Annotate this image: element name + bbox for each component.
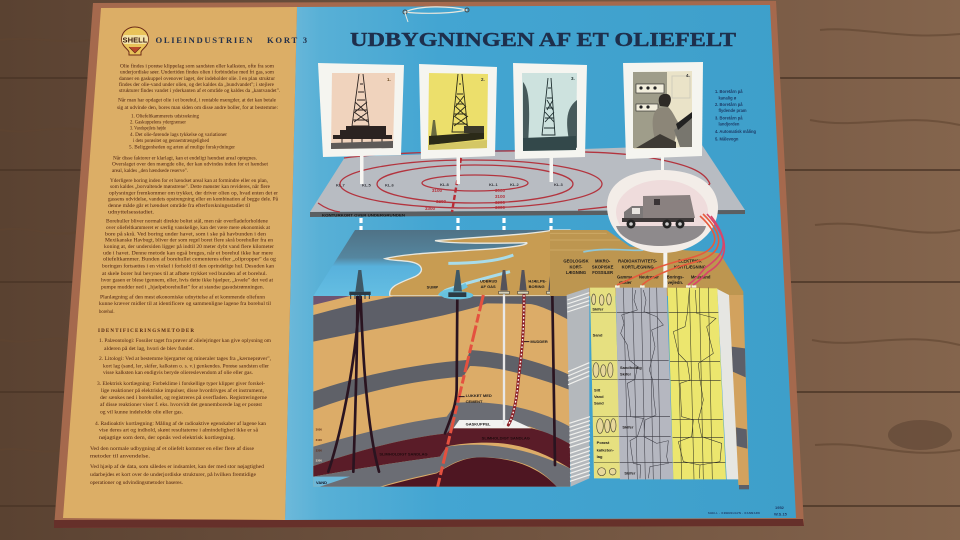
- yellow fossil column: Sand: [594, 401, 604, 406]
- text block: reserves and drilling: udnyttelsesstadiet.: [108, 210, 154, 216]
- text block: reserves and drilling: gassens udvidelse, vandets opstrengning eller en kombination af begge dele. På: [108, 196, 279, 202]
- legend: photo key: kanalig ø: [718, 96, 737, 100]
- print credit: W.S.15: [774, 512, 788, 516]
- photo card 3: land derrick in jungle: [513, 63, 587, 159]
- derricks: [349, 270, 558, 299]
- text block: reserves and drilling: bore på skrå. Ved boring under havet, som i ske på havbunden i den: [105, 232, 267, 238]
- map labels: [336, 182, 563, 188]
- radioactivity log: Skifer: [624, 471, 636, 476]
- text block: introduction: Når man har opdaget olie i et borehul, i rentable mængder, at det kan betale: [118, 98, 276, 104]
- yellow fossil column: Porøst: [597, 440, 610, 445]
- column headings: SKOPISKE: [592, 264, 614, 269]
- list: factors: 1. Oliefeltkammerets udstrækning: [131, 114, 200, 120]
- map labels: KL.6: [385, 182, 394, 188]
- text block: reserves and drilling: oplysninger fremkommer om trykket, der driver olien op, hvad enten det er: [109, 192, 279, 196]
- column headings: Neutroner: [639, 274, 659, 279]
- poster frame: [54, 1, 804, 528]
- text block: reserves and drilling: boringen fortsættes i en vinkel i forhold til den oprindelige hul. Desuden kan: [102, 264, 275, 270]
- column headings: vejledn.: [668, 280, 683, 285]
- terrain behind logs: [550, 230, 743, 296]
- column headings: FOSSILER: [592, 270, 613, 275]
- heading: identification methods: IDENTIFICERINGSMETODER: [98, 329, 194, 334]
- text block: methods: 1. Palæontologi: Fossiler taget fra prøver af olielejringer kan give oplysning om: [99, 339, 271, 344]
- text block: methods: af disse reaktioner viser f. eks. hvorvidt det gennemborede lag er porøst: [100, 403, 263, 408]
- title: UDBYGNINGEN AF ET OLIEFELT: [350, 29, 737, 51]
- text block: reserves and drilling: hvor gasen er blese igennem, eller, hvis dette ikke hjælper, „kvæle" det ved at: [101, 278, 274, 284]
- block diagram: oil field cross-section: [313, 230, 570, 487]
- text block: methods: lige reaktioner på elektriske impulser, disse hvordrivges af et instrument,: [101, 388, 264, 394]
- list: factors: [129, 114, 235, 150]
- list: factors: 5. Beliggenheden og arten af mulige forskydninger: [129, 146, 235, 150]
- text block: reserves and drilling: borehul.: [99, 310, 114, 315]
- contour depth labels: 3100: [495, 194, 506, 199]
- text block: introduction: findes der olie-vand under olien, og det kaldes da „bundvandet"; i stejlere: [119, 83, 274, 88]
- list: factors: 4. Det olie-førende lags tykkelse og variationer: [130, 133, 227, 138]
- section labels: SLIMHOLDIGT SANDLAG: [379, 451, 428, 456]
- legend: photo key: 2. Boretårn på: [715, 102, 743, 107]
- text block: introduction: sig at udvinde den, bores man siden om disse andre boller, for at bestemme:: [117, 106, 278, 111]
- column headings: stråler: [619, 280, 632, 285]
- legend: photo key: 5. Målevogn: [715, 136, 739, 142]
- contour depth labels: 3200: [436, 199, 447, 204]
- panel: tan text column: [63, 7, 307, 520]
- contour depth labels: 3000: [495, 188, 506, 193]
- column headings: MIKRO-: [595, 258, 611, 263]
- subtitle: KORT 3: [267, 35, 307, 45]
- rock layers: [313, 296, 570, 487]
- legend: photo key: [715, 89, 757, 142]
- text block: methods: 3. Elektrisk kortlægning: Forbeklime i forskellige typer klipper giver forskel-: [97, 382, 265, 387]
- hanging string: [403, 7, 469, 22]
- photo card 2: floating barge: [419, 64, 497, 159]
- column headings: KORT-: [570, 264, 583, 269]
- map caption: KONTURKORT OVER UNDERGRUNDEN: [322, 212, 405, 217]
- icon: Shell logo: SHELL: [123, 35, 148, 44]
- map labels: KL.8: [440, 182, 449, 187]
- radioactivity log: Sandholdig: [620, 365, 642, 370]
- yellow fossil column: Skifer: [592, 306, 604, 311]
- column headings: LÆGNING: [566, 270, 586, 275]
- text block: reserves and drilling: [99, 156, 279, 315]
- section labels: AF GAS: [481, 284, 496, 289]
- map labels: KL.1: [489, 182, 498, 187]
- text block: methods: 4. Radioaktiv kortlægning: Måling af de radioaktive egenskaber af lagene kan: [95, 421, 267, 427]
- right cut face: [728, 295, 749, 489]
- red fault on map: [452, 158, 461, 212]
- photo card 1: offshore rig: 1.: [387, 77, 391, 82]
- legend: photo key: 1. Boretårn på: [715, 89, 743, 94]
- text block: methods: alderen på det lag, hvori de blev fundet.: [104, 346, 194, 352]
- section labels: VAND: [316, 480, 327, 485]
- contour depth labels: 3300: [495, 205, 506, 210]
- radioactivity log: Skifer: [622, 425, 634, 430]
- contour depth labels: 3300: [425, 206, 436, 211]
- text block: reserves and drilling: areal, kaldes „den hændsede reserve".: [112, 169, 188, 174]
- photo card 1: offshore rig: [318, 63, 404, 157]
- red logging cables: [617, 214, 724, 285]
- red fault line: [438, 295, 483, 487]
- section labels: HJÆLPE-: [528, 279, 547, 284]
- photo card 4: recording operator: [623, 62, 703, 159]
- column headings: GEOLOGISK: [563, 258, 589, 263]
- column headings: Modstand: [691, 274, 711, 279]
- photo card 3: land derrick in jungle: 3.: [571, 76, 575, 81]
- oil wells: [328, 295, 555, 472]
- text block: methods: kort lag (sand, ler, skifer, kalksten o. s. v.) genkendes. Porøse sandsten eller: [103, 364, 270, 370]
- text block: reserves and drilling: at skele borer hul bevynes til at afbøte trykket ved bunden af et borehul.: [102, 272, 267, 277]
- yellow fossil column: [590, 288, 621, 478]
- legend: photo key: 4. Automatisk måling: [715, 129, 757, 134]
- text block: reserves and drilling: kunne kræver midler til at identificere og sammenligne lagene fra borehul til: [99, 302, 272, 307]
- text block: methods: nøjagtige som dem, der opnås ved elektrisk kortlægning.: [99, 435, 235, 441]
- depth labels: 3300: [316, 459, 322, 463]
- text block: methods: vise deres art og indhold, skønt resultaterne i almindelighed ikke er så: [99, 428, 259, 434]
- radioactivity log: Skifer: [620, 371, 632, 376]
- section labels: SLIMHOLDIGT SANDLAG: [482, 436, 530, 441]
- print credit: 1952: [775, 505, 785, 510]
- text block: reserves and drilling: Borehuller bliver normalt direkte boltet stål, men når overfladeforholdene: [106, 218, 268, 224]
- text block: introduction: strukturer findes vandet i yderkanten af et område og kaldes da „kantvandet".: [119, 88, 280, 94]
- yellow fossil column: Sand: [593, 332, 603, 337]
- depth labels: [316, 428, 322, 463]
- arrows: [459, 342, 529, 397]
- text block: introduction: danner en gaskuppel ovenover laget, der indeholder olie. I en plan struktur: [119, 77, 275, 82]
- poster blue background: [285, 5, 796, 520]
- white post: [663, 252, 667, 288]
- map labels: KL.5: [362, 182, 371, 188]
- well log columns: [550, 230, 749, 489]
- text block: reserves and drilling: denne måde går et hændset område fra efterforskningsstadiet til: [108, 203, 251, 209]
- text block: methods: 2. Litologi: Ved at bestemme bjergarter og mineraler tages fra „kærneprøver",: [99, 357, 271, 362]
- column headings: ELEKTRISK: [678, 258, 702, 263]
- text block: reserves and drilling: Planlægning af den mest økonomiske udnyttelse af et kommende oliefunn: [100, 296, 266, 300]
- text block: reserves and drilling: pumpe mudder ned i „hjælpeborehullet" for at standse gasudstrømningen.: [101, 286, 264, 290]
- subtitle: OLIEINDUSTRIEN: [156, 35, 253, 45]
- text block: reserves and drilling: koning at, der undersiden ligger på indtil 20 meter dybt vand flere kilometer: [104, 244, 275, 250]
- truck callout bubble: [607, 170, 718, 253]
- yellow fossil column: lag: [597, 454, 603, 459]
- dashed links from map to wells: [361, 218, 551, 270]
- photo card 2: floating barge: 2.: [481, 77, 485, 82]
- section labels: CEMENT: [466, 399, 483, 404]
- text block: methods: udarbejdes et kort over de underjordiske strukturer, på hvilken fremtidige: [90, 472, 256, 478]
- text block: introduction: [117, 64, 280, 111]
- section labels: LUKKET MED: [466, 393, 492, 398]
- yellow fossil column: Vand: [594, 394, 604, 399]
- depth labels: 3000: [316, 428, 322, 432]
- photo card 4: recording operator: 4.: [686, 73, 690, 78]
- text block: reserves and drilling: Når disse faktorer er klarlagt, kan et endeligt hændset areal optegnes.: [113, 156, 257, 162]
- contour depth labels: 3200: [495, 200, 506, 205]
- section labels: SUMP: [427, 284, 439, 289]
- text block: introduction: underjordiske søer. Undertiden findes olien i forbindelse med fri gas, som: [120, 70, 274, 76]
- map labels: KL.7: [336, 182, 345, 188]
- radioactivity log: [616, 288, 673, 479]
- list: factors: 2. Gaskuppelens ydergrænser: [130, 120, 186, 126]
- text block: reserves and drilling: oliefeltkammer. Bunden af borehullet cementeres efter „olipropper" da og: [103, 258, 277, 262]
- depth labels: 3200: [316, 448, 322, 452]
- section labels: BORING: [529, 284, 545, 289]
- text block: methods: der sænkes ned i borehullet, og registreres på overfladen. Registreringerne: [100, 395, 267, 401]
- legend: photo key: landjorden: [718, 122, 740, 126]
- column headings: RADIOAKTIVITETS-: [618, 258, 658, 263]
- contour map plate: [310, 145, 745, 217]
- well posts: [360, 155, 664, 184]
- list: factors: i dets porøsitet og gennemtrængelighed: [133, 139, 210, 144]
- text block: introduction: Olie findes i porøse klippelag som sandsten eller kalksten, ofte fra som: [120, 64, 274, 70]
- text block: methods: og vil kunne indeholde olie eller gas.: [100, 410, 183, 416]
- text block: methods: metoder til anvendelse.: [90, 454, 150, 460]
- text block: reserves and drilling: over oliefeltkammeret er særlig vanskelige, kan det være mere økonomisk at: [106, 226, 271, 231]
- contour depth labels: 3100: [432, 188, 443, 193]
- map labels: KL.2: [510, 182, 519, 187]
- text block: reserves and drilling: ude i havet. Denne metode kan også bruges, når et borehul ikke har mere: [103, 250, 273, 256]
- white margin strip: [717, 289, 738, 479]
- text block: methods: Ved den normale udbygning af et oliefelt kommer en eller flere af disse: [90, 447, 254, 452]
- log caps: [615, 285, 696, 288]
- column headings: KORTLÆGNING: [622, 264, 654, 269]
- electrical log: [668, 288, 726, 479]
- text block: reserves and drilling: Yderligere boring inden for et hændset areal kan at formindre eller en plan,: [110, 179, 268, 184]
- text block: methods: [90, 339, 271, 486]
- column headings: [563, 258, 711, 285]
- column headings: Borings-: [667, 274, 684, 279]
- map contour lines: [318, 151, 710, 212]
- section labels: [316, 279, 548, 485]
- icon: survey truck: [622, 195, 695, 228]
- contour depth labels: [425, 188, 506, 211]
- text block: reserves and drilling: Mexikanske Havbugt, bliver der som regel boret flere skrå borehuller fra en: [105, 238, 274, 244]
- text block: methods: visse kalksten kan endigvis beryde oliereslevendom af olie eller gas.: [103, 371, 253, 376]
- legend: photo key: 3. Boretårn på: [715, 116, 743, 120]
- print credit: SHELL · KØBENHAVN · DANMARK: [708, 511, 760, 515]
- section labels: GASKUPPEL: [466, 422, 491, 427]
- icon: Shell logo: [122, 27, 148, 55]
- section labels: UDBRUD: [480, 279, 497, 284]
- depth labels: 3100: [316, 438, 322, 442]
- column headings: KORTLÆGNING: [674, 265, 706, 270]
- hatched geological column: [567, 288, 590, 487]
- text block: methods: operationer og udvindingsmetoder baseres.: [90, 481, 183, 486]
- legend: photo key: flydende pram: [718, 108, 747, 113]
- yellow fossil column: kalksten-: [597, 447, 615, 452]
- yellow fossil column: Silt: [594, 387, 601, 392]
- text block: reserves and drilling: Overslaget over den mængde olie, der kan udvindes inden for et hændset: [112, 162, 269, 168]
- subtitle: [156, 35, 307, 45]
- text block: reserves and drilling: som kaldes „borvaltende mønstrene". Dette mønster kan revideres, når flere: [110, 184, 270, 190]
- list: factors: 3. Vandspejlets højde: [130, 126, 166, 132]
- text block: methods: Ved hjælp af de data, som således er indsamlet, kan der med stor nøjagtighed: [90, 464, 265, 470]
- print credit: [708, 505, 788, 516]
- section labels: MUDDER: [530, 339, 548, 344]
- column headings: Gamma-: [617, 274, 634, 279]
- map labels: KL.3: [554, 182, 563, 187]
- land and sea surface: [313, 230, 570, 296]
